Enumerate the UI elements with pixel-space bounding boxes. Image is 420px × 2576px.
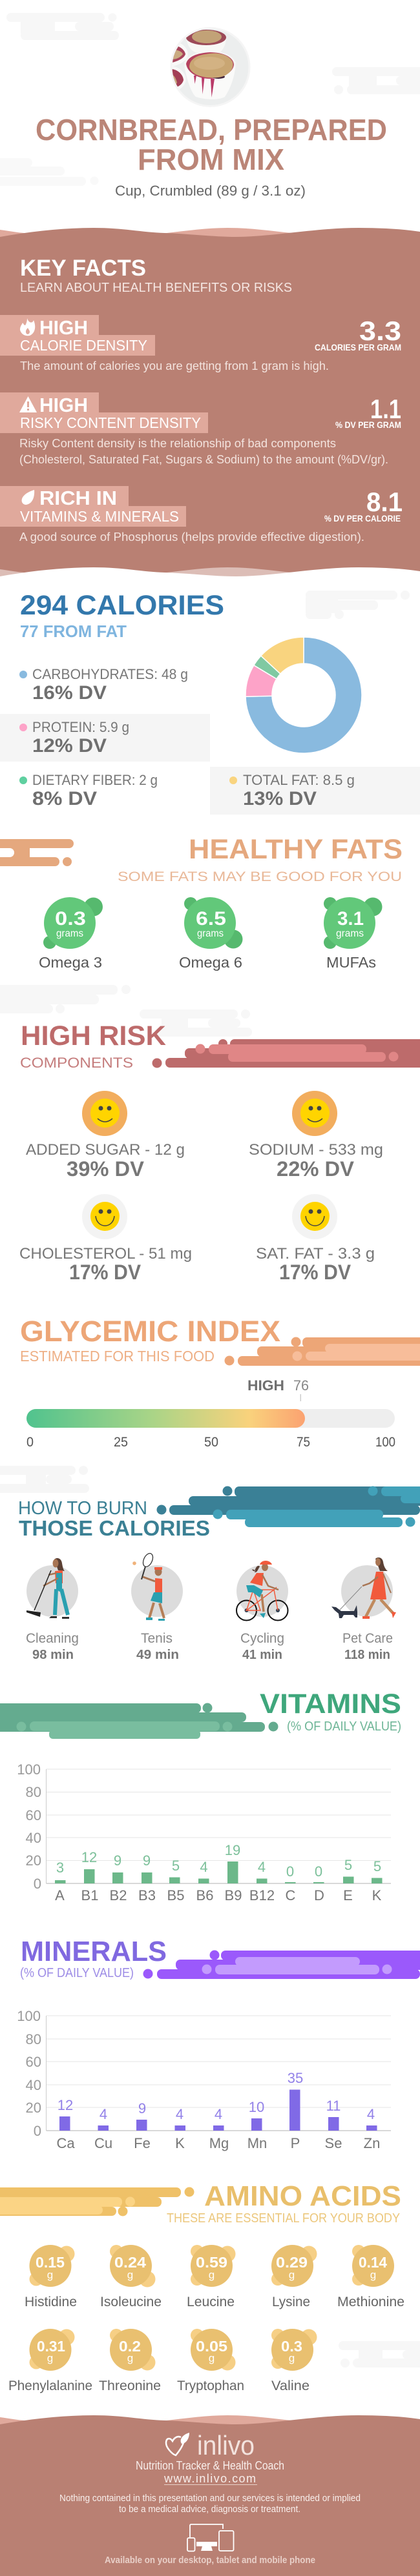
amino: histidine: 0.15 [36, 2254, 65, 2271]
item: sodium [249, 1091, 383, 1181]
amino: valine: g [289, 2352, 295, 2364]
y axis labels: 40 [26, 1830, 41, 1846]
item: cholesterol: CHOLESTEROL - 51 mg [19, 1245, 192, 1263]
amino: phenylalanine [8, 2329, 92, 2393]
bars [59, 2090, 377, 2131]
y axis labels: 100 [17, 2008, 41, 2024]
y axis labels: 20 [26, 1852, 41, 1869]
title: CORNBREAD, PREPARED [36, 113, 387, 147]
legend: total fat [229, 772, 355, 809]
badge: omega 3: Omega 3 [39, 954, 102, 971]
value labels: 0 [286, 1863, 294, 1880]
ribbon: minerals [143, 1951, 420, 1979]
icon: devices [187, 2524, 234, 2551]
x axis labels: B2 [110, 1887, 127, 1903]
item: saturated fat: 17% DV [279, 1261, 352, 1284]
gauge scale: 25 [114, 1435, 128, 1450]
x axis labels: A [55, 1887, 65, 1903]
logo: inlivo: inlivo [197, 2430, 255, 2460]
badge: mufas: MUFAs [326, 954, 376, 971]
icon: smiley on orange [82, 1091, 127, 1136]
panel: high risk components [19, 1020, 420, 1284]
amino: histidine [25, 2245, 77, 2309]
value labels [58, 2070, 375, 2122]
panel: how to burn those calories [18, 1486, 420, 1662]
subheading: key facts: LEARN ABOUT HEALTH BENEFITS OR RISKS [20, 281, 292, 295]
value labels: 35 [288, 2070, 303, 2086]
y axis labels [17, 2008, 41, 2139]
tag: high calorie density: HIGH [39, 316, 88, 339]
stat: 8.1 percent dv per calorie [324, 487, 403, 523]
stat: 1.1 percent dv per gram: % DV PER GRAM [335, 420, 401, 430]
activity: tennis: Tenis [141, 1631, 173, 1646]
background cloud: burn [0, 1466, 89, 1493]
activity: cycling [236, 1561, 288, 1662]
amino: methionine: 0.14 [359, 2254, 387, 2271]
value labels: 11 [326, 2098, 341, 2114]
subheading: ESTIMATED FOR THIS FOOD [20, 1348, 215, 1364]
y axis labels: 20 [26, 2100, 41, 2116]
legend: dietary fiber: 8% DV [32, 788, 97, 809]
amino: valine [271, 2329, 317, 2393]
disclaimer: to be a medical advice, diagnosis or treatment. [119, 2504, 300, 2515]
x axis labels: P [291, 2135, 300, 2151]
illustration: woman sweeping [26, 1558, 78, 1619]
item: sodium: 22% DV [277, 1157, 355, 1181]
activity: cleaning: 98 min [32, 1648, 74, 1662]
amino: methionine: g [370, 2269, 376, 2281]
ribbon: vitamins [0, 1703, 278, 1739]
tag: high risky content density: HIGH [39, 394, 88, 416]
gauge scale: 0 [26, 1435, 34, 1450]
badge: omega 6: grams [197, 928, 224, 939]
title [36, 113, 387, 176]
badge: mufas: grams [336, 928, 364, 939]
value labels: 4 [200, 1859, 208, 1875]
panel: minerals [17, 1936, 420, 2151]
heading: amino acids: AMINO ACIDS [204, 2180, 401, 2212]
legend: dietary fiber: DIETARY FIBER: 2 g [32, 772, 158, 788]
description: (Cholesterol, Saturated Fat, Sugars & Sodium) to the amount (%DV/gr). [19, 453, 388, 466]
legend: total fat: TOTAL FAT: 8.5 g [243, 772, 355, 788]
heading: vitamins: VITAMINS [260, 1689, 401, 1719]
icon: smiley on orange [292, 1091, 337, 1136]
gauge value: high 76 [247, 1377, 309, 1401]
icon: smiley on grey [82, 1194, 127, 1239]
amino: isoleucine [100, 2245, 162, 2309]
disclaimer [59, 2493, 361, 2515]
panel: key facts [0, 228, 420, 581]
item: sodium: SODIUM - 533 mg [249, 1141, 383, 1159]
donut chart [246, 637, 362, 753]
ribbon: high risk [152, 1039, 420, 1068]
background cloud: header right [332, 67, 420, 94]
subheading: THESE ARE ESSENTIAL FOR YOUR BODY [167, 2211, 400, 2226]
value labels: 9 [114, 1852, 121, 1869]
wave: top edge [0, 228, 420, 574]
wave: bottom edge [0, 567, 420, 581]
value labels: 10 [249, 2099, 264, 2115]
legend: dietary fiber [19, 772, 158, 809]
badge: omega 6 [179, 897, 243, 971]
heading: those calories: THOSE CALORIES [19, 1516, 210, 1540]
tag: high calorie density: CALORIE DENSITY [20, 337, 147, 354]
description: The amount of calories you are getting from 1 gram is high. [20, 360, 329, 372]
amino: leucine: g [209, 2269, 215, 2281]
item: cholesterol: 17% DV [69, 1261, 142, 1284]
description [19, 437, 388, 466]
amino: isoleucine: 0.24 [114, 2254, 146, 2271]
amino: tryptophan: Tryptophan [177, 2378, 244, 2393]
activity: cycling: Cycling [240, 1631, 284, 1646]
stat: 1.1 percent dv per gram [335, 394, 401, 430]
tag: high risky content density [0, 392, 208, 433]
food photo [169, 27, 252, 107]
amino: methionine: Methionine [337, 2295, 404, 2309]
x axis labels: D [314, 1887, 324, 1903]
value labels: 5 [172, 1858, 180, 1874]
panel: protein background [0, 714, 210, 762]
tag: rich in vitamins and minerals: RICH IN [39, 487, 117, 509]
panel: glycemic index [20, 1315, 420, 1450]
icon: warning triangle [19, 396, 37, 412]
subheading: components: COMPONENTS [20, 1055, 133, 1071]
amino: histidine: g [47, 2269, 53, 2281]
amino: leucine: 0.59 [196, 2254, 227, 2271]
legend: carbohydrates: CARBOHYDRATES: 48 g [32, 666, 188, 682]
x axis labels: B1 [81, 1887, 98, 1903]
legend: total fat: 13% DV [243, 788, 317, 809]
stat: 8.1 percent dv per calorie: % DV PER CALORIE [324, 514, 401, 523]
amino: threonine: Threonine [99, 2378, 161, 2393]
amino: isoleucine: Isoleucine [100, 2295, 162, 2309]
activity: pet care: 118 min [344, 1648, 390, 1662]
amino: phenylalanine: 0.31 [37, 2338, 65, 2355]
amino: valine: Valine [271, 2378, 310, 2393]
value labels: 12 [58, 2097, 73, 2113]
x axis labels: Cu [94, 2135, 112, 2151]
fact: rich in vitamins and minerals [0, 486, 403, 543]
panel: amino acids [0, 2180, 420, 2393]
tag: high risky content density: RISKY CONTENT DENSITY [20, 414, 201, 431]
gauge value: high 76: 76 [293, 1377, 309, 1394]
activity: tennis: 49 min [136, 1648, 179, 1662]
ribbon: glycemic [225, 1337, 420, 1366]
heading: how to burn: HOW TO BURN [18, 1498, 147, 1519]
heading: healthy fats: HEALTHY FATS [189, 834, 403, 865]
item: added sugar: 39% DV [67, 1157, 145, 1181]
stat: 3.3 calories per gram: CALORIES PER GRAM [315, 343, 401, 352]
amino: leucine [187, 2245, 235, 2309]
illustration: cyclist [236, 1561, 288, 1620]
value labels: 4 [258, 1859, 266, 1875]
heading: minerals: MINERALS [21, 1936, 167, 1967]
x axis labels: Se [325, 2135, 342, 2151]
item: saturated fat: SAT. FAT - 3.3 g [256, 1245, 375, 1263]
x axis labels: Ca [56, 2135, 75, 2151]
disclaimer: Nothing contained in this presentation and our services is intended or implied [59, 2493, 361, 2504]
ribbon: amino acids [0, 2187, 194, 2216]
illustration: tennis player [131, 1552, 183, 1621]
amino: tryptophan: 0.05 [196, 2338, 227, 2355]
x axis labels: B9 [225, 1887, 242, 1903]
amino: phenylalanine: g [47, 2352, 53, 2364]
amino: methionine [337, 2245, 404, 2309]
panel: footer [0, 2415, 420, 2576]
x axis labels: B6 [196, 1887, 213, 1903]
amino: lysine: 0.29 [276, 2254, 308, 2271]
icon: smiley on grey [292, 1194, 337, 1239]
stat: 8.1 percent dv per calorie: 8.1 [366, 487, 403, 517]
icon: heart with leaf [166, 2433, 189, 2455]
amino: phenylalanine: Phenylalanine [8, 2378, 92, 2393]
y axis labels: 60 [26, 1807, 41, 1823]
legend: protein: 12% DV [32, 735, 107, 756]
tagline: Nutrition Tracker & Health Coach [136, 2459, 284, 2472]
activity: tennis [131, 1552, 183, 1662]
heading: glycemic index: GLYCEMIC INDEX [20, 1315, 280, 1348]
subheading: SOME FATS MAY BE GOOD FOR YOU [118, 869, 402, 884]
background cloud: header lower left [0, 158, 98, 186]
gauge scale: 50 [204, 1435, 218, 1450]
x axis labels: Mg [209, 2135, 229, 2151]
value labels: 5 [373, 1858, 381, 1874]
value labels: 4 [100, 2106, 107, 2122]
website link: www.inlivo.com [163, 2472, 256, 2485]
gauge scale: 100 [375, 1435, 395, 1450]
activity: cleaning: Cleaning [26, 1631, 79, 1646]
gauge value: high 76: HIGH [247, 1377, 284, 1394]
icon: leaf [22, 490, 34, 505]
value labels: 5 [344, 1857, 352, 1873]
gauge bar [26, 1409, 395, 1428]
y axis labels [17, 1761, 41, 1892]
subheading: (% OF DAILY VALUE) [20, 1966, 134, 1980]
value labels: 0 [315, 1863, 322, 1880]
activity: pet care: Pet Care [342, 1631, 393, 1646]
gauge scale [26, 1435, 395, 1450]
value labels: 3 [56, 1860, 64, 1876]
heading: 294 calories: 294 CALORIES [20, 590, 224, 621]
amino: lysine: g [289, 2269, 295, 2281]
badge: omega 3: grams [56, 928, 83, 939]
y axis labels: 0 [34, 1876, 41, 1892]
background cloud: header left [6, 13, 119, 40]
legend: carbohydrates: 16% DV [32, 682, 107, 704]
stat: 3.3 calories per gram [315, 316, 401, 352]
description: Risky Content density is the relationship of bad components [19, 437, 336, 450]
heading: key facts: KEY FACTS [20, 256, 146, 281]
legend: protein [19, 719, 129, 756]
panel: vitamins [0, 1689, 401, 1903]
background cloud: amino [339, 2341, 420, 2368]
ribbon: healthy fats [0, 839, 74, 866]
illustration: woman walking dog [331, 1557, 396, 1619]
panel: calories [0, 590, 420, 815]
x axis labels: B12 [249, 1887, 275, 1903]
chart grid [47, 2016, 391, 2131]
activity: cleaning [26, 1558, 79, 1662]
fact: calorie density [0, 315, 401, 372]
x axis labels: Fe [134, 2135, 151, 2151]
badge: omega 3: 0.3 [55, 908, 86, 929]
bar chart: minerals [17, 2008, 391, 2151]
badge: omega 3 [39, 897, 103, 971]
badge: mufas [324, 897, 383, 971]
item: saturated fat [256, 1194, 375, 1284]
subtitle: serving size: Cup, Crumbled (89 g / 3.1 oz) [115, 183, 306, 199]
x axis labels [56, 2135, 380, 2151]
logo: inlivo [166, 2430, 255, 2460]
ribbon: burn [156, 1486, 420, 1527]
bars [55, 1861, 383, 1883]
icon: flame [20, 318, 35, 336]
item: added sugar: ADDED SUGAR - 12 g [26, 1141, 185, 1159]
x axis labels: E [343, 1887, 353, 1903]
bar chart: vitamins [17, 1761, 391, 1903]
heading: high risk: HIGH RISK [21, 1020, 166, 1051]
activity: cycling: 41 min [242, 1648, 282, 1662]
x axis labels: K [372, 1887, 382, 1903]
availability note: Available on your desktop, tablet and mobile phone [105, 2555, 315, 2566]
amino: leucine: Leucine [187, 2295, 235, 2309]
background cloud [306, 591, 410, 619]
stat: 1.1 percent dv per gram: 1.1 [370, 394, 401, 424]
value labels: 4 [367, 2106, 375, 2122]
subheading: (% OF DAILY VALUE) [287, 1719, 401, 1734]
amino: valine: 0.3 [281, 2338, 302, 2355]
value labels: 19 [225, 1842, 240, 1858]
amino: threonine: g [127, 2352, 133, 2364]
x axis labels: B3 [138, 1887, 156, 1903]
tag: rich in vitamins and minerals: VITAMINS & MINERALS [20, 508, 179, 525]
y axis labels: 40 [26, 2077, 41, 2093]
legend: protein: PROTEIN: 5.9 g [32, 719, 129, 735]
chart grid [47, 1769, 391, 1883]
amino: tryptophan [177, 2329, 244, 2393]
y axis labels: 100 [17, 1761, 41, 1778]
stat: 3.3 calories per gram: 3.3 [359, 316, 401, 346]
x axis labels: Mn [247, 2135, 267, 2151]
description: A good source of Phosphorus (helps provide effective digestion). [19, 531, 364, 543]
value labels: 9 [138, 2100, 146, 2116]
x axis labels: K [175, 2135, 185, 2151]
amino: isoleucine: g [127, 2269, 133, 2281]
subheading: 77 from fat: 77 FROM FAT [20, 622, 127, 641]
item: added sugar [26, 1091, 185, 1181]
badge: omega 6: 6.5 [196, 908, 226, 929]
title: FROM MIX [138, 143, 284, 176]
amino: threonine [99, 2329, 161, 2393]
wave: footer top [0, 2415, 420, 2576]
amino: lysine: Lysine [272, 2295, 310, 2309]
background cloud: high risk right [140, 1009, 252, 1037]
panel: healthy fats [0, 834, 403, 971]
legend: carbohydrates [19, 666, 188, 704]
x axis labels: C [286, 1887, 296, 1903]
amino: histidine: Histidine [25, 2295, 77, 2309]
fact: risky content density [0, 392, 401, 466]
value labels: 9 [143, 1852, 151, 1869]
background cloud: high risk left [0, 985, 131, 1013]
tag: rich in vitamins and minerals [0, 486, 186, 527]
y axis labels: 0 [34, 2123, 41, 2139]
item: cholesterol [19, 1194, 192, 1284]
x axis labels [55, 1887, 382, 1903]
value labels [56, 1842, 381, 1880]
amino: tryptophan: g [209, 2352, 215, 2364]
y axis labels: 60 [26, 2054, 41, 2070]
value labels: 4 [176, 2106, 184, 2122]
amino: threonine: 0.2 [119, 2338, 141, 2355]
y axis labels: 80 [26, 2031, 41, 2047]
panel: total fat background [210, 767, 420, 815]
badge: omega 6: Omega 6 [179, 954, 242, 971]
gauge scale: 75 [297, 1435, 310, 1450]
amino: lysine [271, 2245, 317, 2309]
tag: high calorie density [0, 315, 155, 356]
value labels: 12 [81, 1849, 97, 1865]
x axis labels: B5 [167, 1887, 184, 1903]
activity: pet care [331, 1557, 396, 1662]
y axis labels: 80 [26, 1784, 41, 1800]
badge: mufas: 3.1 [337, 908, 364, 929]
value labels: 4 [215, 2106, 222, 2122]
x axis labels: Zn [364, 2135, 380, 2151]
